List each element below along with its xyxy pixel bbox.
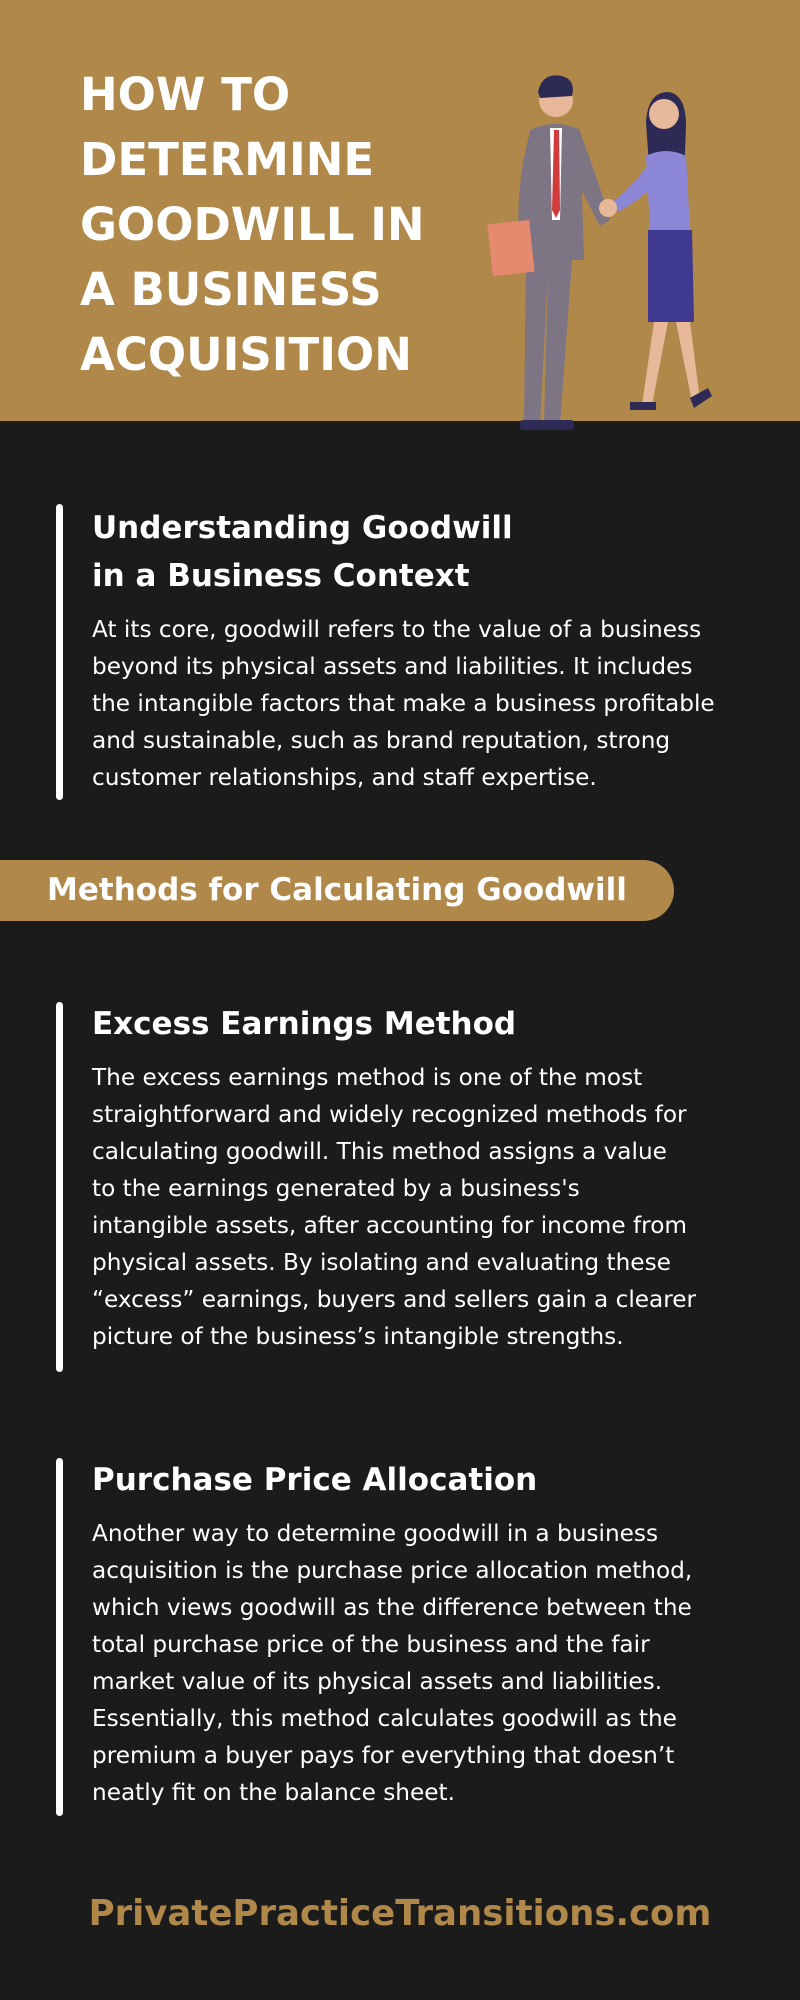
body text: calculating goodwill. This method assigns a value <box>92 1138 667 1165</box>
body text: At its core, goodwill refers to the value of a business <box>92 616 701 643</box>
body text: “excess” earnings, buyers and sellers gain a clearer <box>92 1286 696 1313</box>
man <box>487 75 610 430</box>
heading: in a Business Context <box>92 558 470 594</box>
heading: Purchase Price Allocation <box>92 1462 537 1498</box>
panel: understanding goodwill <box>56 504 715 800</box>
body text: and sustainable, such as brand reputation, strong <box>92 727 670 754</box>
body text: straightforward and widely recognized methods for <box>92 1101 687 1128</box>
body text <box>92 616 715 791</box>
body text: the intangible factors that make a business profitable <box>92 690 715 717</box>
body text: beyond its physical assets and liabilities. It includes <box>92 653 692 680</box>
body text: The excess earnings method is one of the most <box>92 1064 642 1091</box>
body text: neatly fit on the balance sheet. <box>92 1779 455 1806</box>
heading: Understanding Goodwill <box>92 510 513 546</box>
title <box>80 68 425 381</box>
footer url: PrivatePracticeTransitions.com <box>89 1893 711 1934</box>
panel: excess earnings <box>56 1002 696 1372</box>
body text: acquisition is the purchase price allocation method, <box>92 1557 692 1584</box>
title: HOW TO <box>80 68 290 121</box>
header background <box>0 0 800 421</box>
body text: picture of the business’s intangible strengths. <box>92 1323 624 1350</box>
banner: methods heading <box>0 860 674 921</box>
illustration: handshake <box>488 75 712 430</box>
title: GOODWILL IN <box>80 198 425 251</box>
body text: Another way to determine goodwill in a business <box>92 1520 658 1547</box>
body text: premium a buyer pays for everything that doesn’t <box>92 1742 674 1769</box>
body text <box>92 1520 692 1806</box>
body text: to the earnings generated by a business's <box>92 1175 580 1202</box>
title: ACQUISITION <box>80 328 412 381</box>
heading: Excess Earnings Method <box>92 1006 516 1042</box>
woman <box>599 92 712 410</box>
body text: intangible assets, after accounting for income from <box>92 1212 687 1239</box>
body text: market value of its physical assets and liabilities. <box>92 1668 662 1695</box>
body text <box>92 1064 696 1350</box>
banner: methods heading: Methods for Calculating Goodwill <box>47 872 627 908</box>
body text: which views goodwill as the difference between the <box>92 1594 692 1621</box>
title: A BUSINESS <box>80 263 382 316</box>
body text: customer relationships, and staff expertise. <box>92 764 597 791</box>
heading <box>92 510 513 594</box>
body text: total purchase price of the business and the fair <box>92 1631 650 1658</box>
panel: purchase price allocation <box>56 1458 692 1816</box>
body text: physical assets. By isolating and evaluating these <box>92 1249 671 1276</box>
title: DETERMINE <box>80 133 374 186</box>
body text: Essentially, this method calculates goodwill as the <box>92 1705 677 1732</box>
